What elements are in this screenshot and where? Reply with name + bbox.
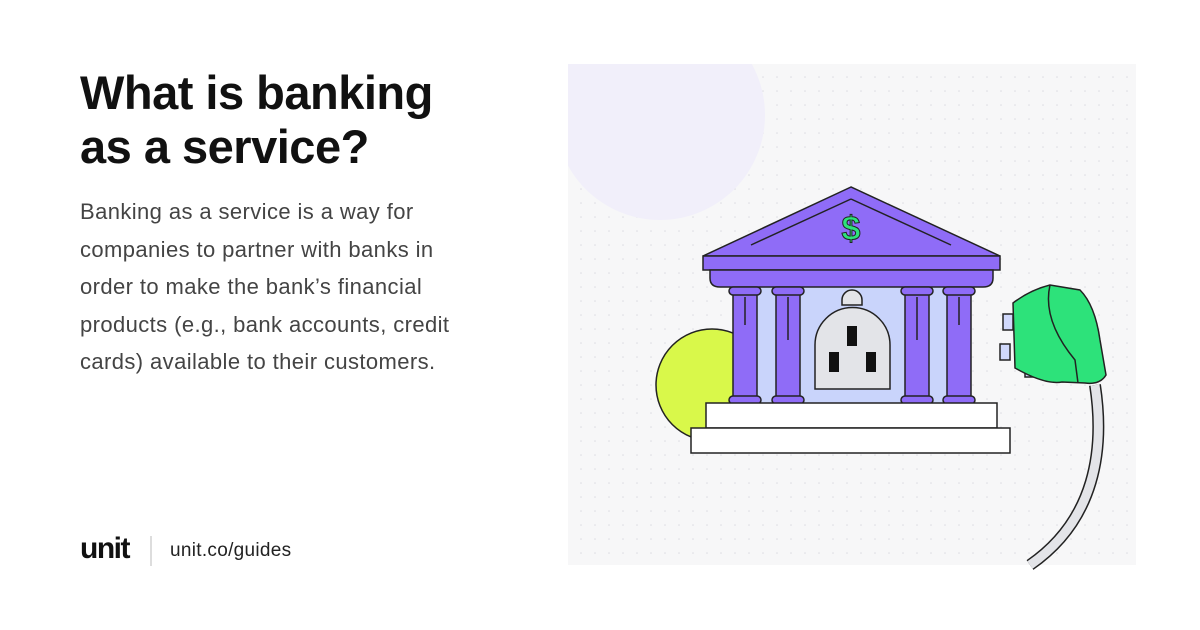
- body text: [80, 199, 449, 374]
- bank building: [691, 187, 1010, 453]
- yellow circle: [656, 329, 768, 441]
- outlet: [842, 290, 862, 305]
- plug and cable: [1000, 285, 1106, 565]
- illustration panel: [568, 64, 1128, 570]
- lavender circle: [580, 76, 764, 218]
- title: [80, 66, 433, 173]
- title: What is banking: [80, 66, 433, 119]
- title: as a service?: [80, 120, 369, 173]
- body text: order to make the bank’s financial: [80, 274, 422, 299]
- dollar sign: $: [842, 210, 861, 248]
- footer logo and url: unit.co/guides: [170, 540, 291, 561]
- body text: products (e.g., bank accounts, credit: [80, 312, 449, 336]
- body text: companies to partner with banks in: [80, 236, 434, 262]
- body text: cards) available to their customers.: [80, 349, 436, 374]
- footer logo and url: [80, 532, 291, 566]
- body text: Banking as a service is a way for: [80, 199, 414, 224]
- footer logo and url: unit: [80, 532, 129, 565]
